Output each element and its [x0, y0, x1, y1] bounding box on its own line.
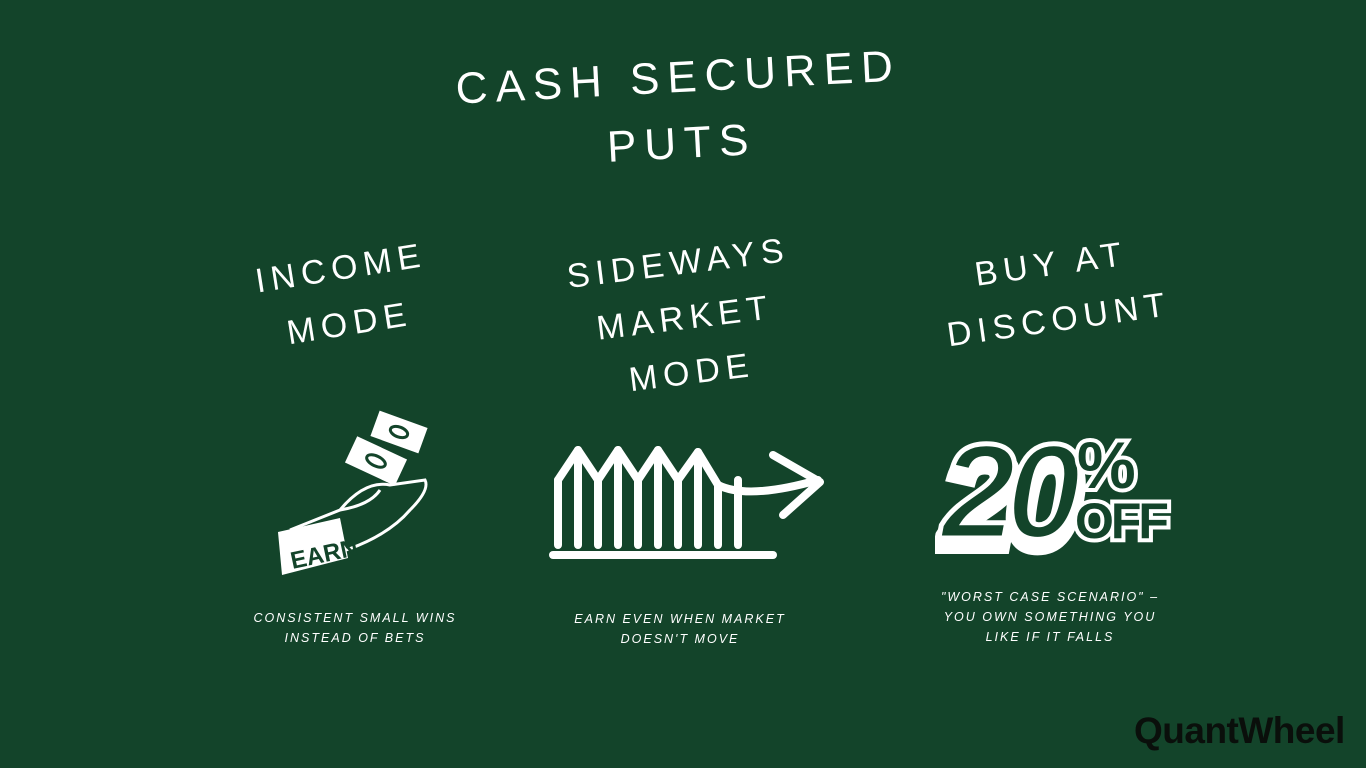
caption: discount: "WORST CASE SCENARIO" – [941, 590, 1159, 604]
icon: 20% off [935, 420, 1172, 560]
caption: income [254, 611, 456, 645]
heading: income mode [253, 236, 429, 352]
logo: QuantWheel [1134, 710, 1345, 751]
title: CASH SECURED [454, 41, 902, 114]
icon: 20% off: % [1077, 428, 1136, 502]
icon: 20% off: OFF [1075, 493, 1167, 549]
title [454, 41, 902, 172]
title: PUTS [606, 115, 758, 172]
caption: sideways: EARN EVEN WHEN MARKET [574, 612, 786, 626]
heading: buy at discount: DISCOUNT [945, 285, 1173, 354]
heading: sideways market mode [565, 231, 792, 399]
heading: sideways market mode: SIDEWAYS [565, 231, 792, 296]
caption: income: INSTEAD OF BETS [285, 631, 425, 645]
heading: buy at discount [945, 235, 1173, 354]
heading: sideways market mode: MODE [627, 346, 756, 399]
icon: fence with arrow [549, 446, 824, 559]
caption: discount: YOU OWN SOMETHING YOU [944, 610, 1156, 624]
caption: discount [941, 590, 1159, 644]
caption: discount: LIKE IF IT FALLS [986, 630, 1114, 644]
heading: buy at discount: BUY AT [972, 235, 1130, 294]
icon: earn hand with money: EARN [288, 534, 360, 575]
heading: income mode: MODE [284, 295, 415, 352]
heading: income mode: INCOME [253, 236, 429, 301]
heading: sideways market mode: MARKET [594, 288, 775, 348]
caption: sideways [574, 612, 786, 646]
icon: earn hand with money [278, 410, 428, 575]
caption: income: CONSISTENT SMALL WINS [254, 611, 456, 625]
caption: sideways: DOESN'T MOVE [621, 632, 739, 646]
